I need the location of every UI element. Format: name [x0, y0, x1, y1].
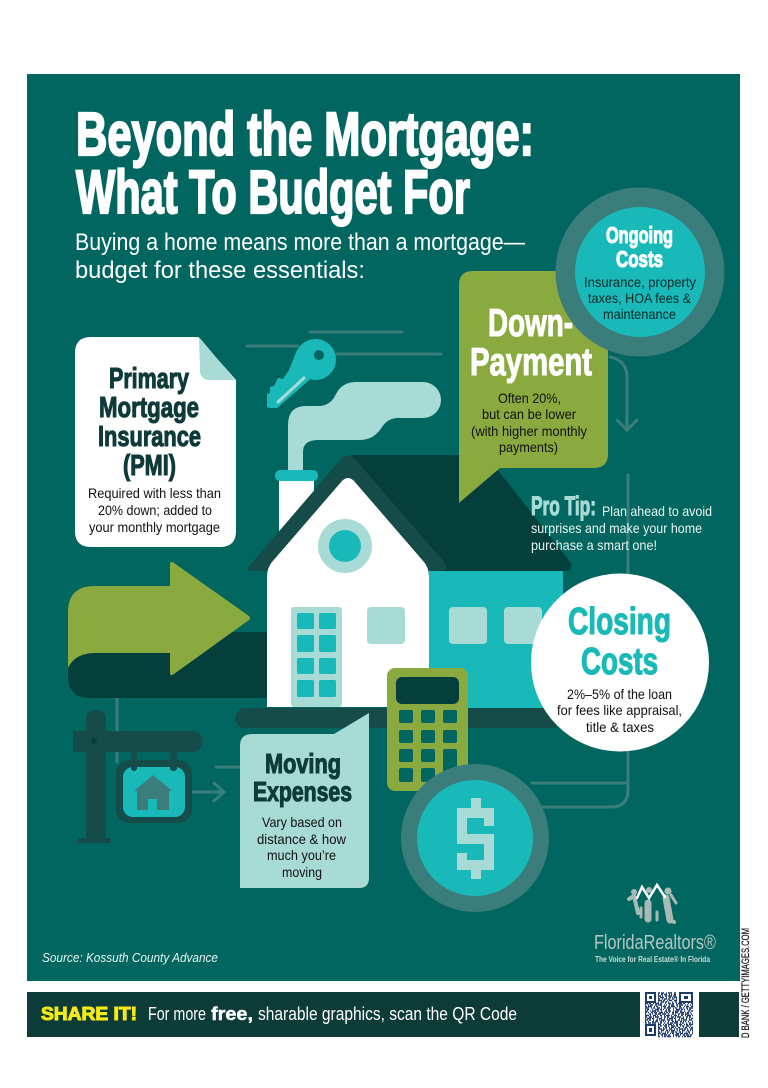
share it text: sharable graphics, scan the QR Code	[258, 1004, 517, 1024]
logo: Florida Realtors: The Voice for Real Estate® In Florida	[595, 955, 710, 964]
body text: Insurance, property	[584, 274, 696, 290]
body text: but can be lower	[482, 406, 576, 422]
subtitle: budget for these essentials:	[75, 257, 365, 284]
body text	[557, 686, 682, 735]
heading: Expenses	[253, 776, 352, 807]
heading: Moving	[265, 748, 341, 779]
title	[76, 100, 534, 226]
gable roof	[248, 456, 446, 571]
round window	[318, 519, 372, 573]
page fold	[199, 337, 235, 380]
background panel	[27, 74, 740, 981]
chimney smoke	[288, 382, 441, 472]
heading: Mortgage	[99, 392, 199, 424]
heading: Down-	[488, 302, 573, 345]
heading: Insurance	[98, 421, 201, 453]
body text: (with higher monthly	[471, 423, 587, 439]
subtitle	[75, 229, 525, 284]
heading	[98, 363, 201, 482]
photo credit: D BANK / GETTYIMAGES.COM	[740, 928, 752, 1038]
icon: sale sign	[73, 710, 203, 843]
body text: moving	[282, 864, 322, 880]
heading: Costs	[581, 641, 658, 683]
body text	[257, 814, 347, 880]
heading: Primary	[109, 363, 189, 395]
logo mark	[629, 885, 676, 924]
heading: (PMI)	[123, 450, 176, 482]
body text: your monthly mortgage	[89, 519, 220, 535]
body text: Vary based on	[262, 814, 342, 830]
body text: distance & how	[257, 831, 347, 847]
heading: Payment	[470, 341, 592, 384]
panel: closing costs	[531, 574, 709, 752]
teal wing	[429, 571, 563, 708]
title: What To Budget For	[76, 158, 470, 226]
panel: moving expenses	[240, 713, 369, 888]
body text: much you’re	[267, 847, 336, 863]
panel: down-payment	[459, 271, 608, 503]
panel: ongoing costs	[556, 188, 724, 356]
pro tip: Pro Tip:	[531, 491, 596, 521]
heading: Closing	[568, 601, 671, 643]
body text: Required with less than	[88, 485, 221, 501]
body text	[471, 390, 587, 455]
share it label: SHARE IT!	[41, 1004, 137, 1024]
share it text: free,	[211, 1004, 253, 1024]
icon: key	[267, 339, 336, 408]
body text: payments)	[499, 439, 558, 455]
pro tip: surprises and make your home	[531, 520, 702, 536]
tall window	[291, 607, 342, 707]
main roof	[350, 455, 571, 571]
chimney	[275, 470, 318, 540]
pro tip: purchase a smart one!	[531, 537, 657, 553]
white wall	[267, 478, 429, 707]
heading	[253, 748, 352, 807]
share it text: For more	[148, 1004, 206, 1024]
flow lines	[117, 332, 637, 807]
heading: Ongoing	[606, 222, 673, 248]
logo: Florida Realtors: FloridaRealtors®	[594, 932, 716, 954]
body text: title & taxes	[586, 719, 654, 735]
heading	[470, 302, 592, 384]
icon: dollar coin	[401, 764, 549, 912]
body text	[584, 274, 696, 322]
heading	[606, 222, 673, 272]
heading	[568, 601, 671, 683]
title: Beyond the Mortgage:	[76, 100, 534, 168]
house base	[235, 708, 556, 728]
body text: 2%–5% of the loan	[567, 686, 672, 702]
body text: taxes, HOA fees &	[588, 290, 692, 306]
illustration: arrow	[68, 562, 267, 698]
source: Source: Kossuth County Advance	[42, 951, 218, 965]
body text: maintenance	[603, 306, 676, 322]
icon: calculator	[387, 668, 468, 791]
logo: Florida Realtors	[594, 885, 716, 964]
subtitle: Buying a home means more than a mortgage—	[75, 229, 525, 256]
body text: Often 20%,	[498, 390, 561, 406]
body text	[88, 485, 221, 535]
panel: primary mortgage insurance	[75, 337, 236, 547]
pro tip	[531, 491, 712, 553]
share it text	[148, 1004, 517, 1024]
heading: Costs	[616, 246, 663, 272]
square window	[367, 607, 405, 644]
illustration: house	[235, 455, 571, 728]
footer bar	[27, 992, 739, 1037]
QR code	[643, 990, 695, 1039]
body text: for fees like appraisal,	[557, 702, 682, 718]
pro tip: Plan ahead to avoid	[602, 503, 712, 519]
body text: 20% down; added to	[98, 502, 212, 518]
